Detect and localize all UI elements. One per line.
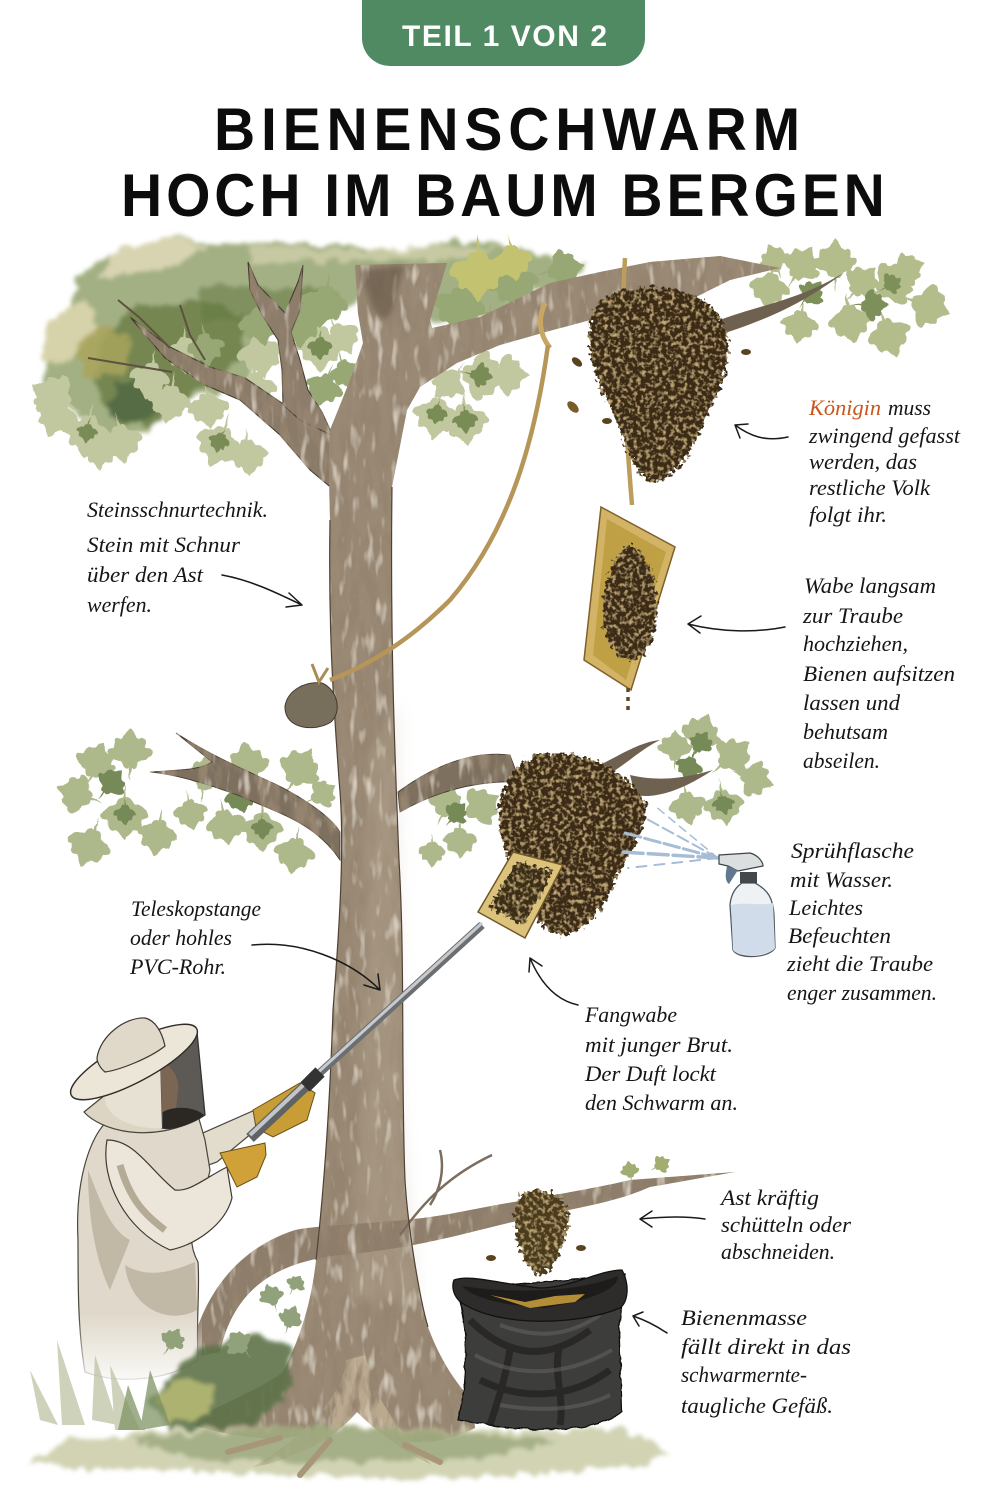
- arrow: shake label to branch: [640, 1211, 705, 1227]
- label: catch comb: Der Duft lockt: [584, 1061, 717, 1086]
- label: queen: folgt ihr.: [809, 502, 887, 527]
- illustration: water spray: [622, 806, 718, 868]
- label: queen: zwingend gefasst: [808, 423, 961, 448]
- arrow: pole label to pole: [252, 944, 380, 990]
- label: spray bottle: Befeuchten: [788, 923, 891, 948]
- label: queen: muss: [888, 395, 931, 420]
- illustration: tree trunk and branches: [88, 256, 845, 1467]
- label: stone and cord technique: Stein mit Schnur: [87, 532, 240, 557]
- label: bee mass falls: taugliche Gefäß.: [681, 1393, 833, 1418]
- label: queen: restliche Volk: [809, 475, 931, 500]
- label: spray bottle: Sprühflasche: [791, 838, 914, 863]
- arrow: bee mass label to bag: [633, 1312, 667, 1333]
- illustration: lower swarm on branch: [486, 1190, 586, 1275]
- label: stone and cord technique: über den Ast: [87, 562, 204, 587]
- label: spray bottle: Leichtes: [788, 895, 863, 920]
- label: raise comb: abseilen.: [803, 748, 880, 773]
- illustration: rope with stone: [285, 303, 550, 728]
- title: HOCH IM BAUM BERGEN: [121, 163, 885, 229]
- label: spray bottle: mit Wasser.: [790, 867, 893, 892]
- label: queen: werden, das: [809, 449, 917, 474]
- label: raise comb: hochziehen,: [803, 631, 908, 656]
- label: telescopic pole: oder hohles: [130, 925, 232, 950]
- label: raise comb: lassen und: [803, 690, 901, 715]
- illustration: rope over branch: [623, 258, 632, 505]
- arrow: comb label to frame: [688, 616, 785, 633]
- illustration: middle left and right foliage: [50, 707, 780, 878]
- illustration: middle swarm cluster: [499, 753, 647, 935]
- label: raise comb: behutsam: [803, 719, 888, 744]
- label: raise comb: Wabe langsam: [804, 573, 936, 598]
- label: raise comb: zur Traube: [802, 603, 903, 628]
- label: raise comb: Bienen aufsitzen: [803, 661, 955, 686]
- label: queen: Königin: [808, 395, 881, 420]
- arrow: queen label to swarm: [735, 424, 788, 439]
- arrow: catch comb label to frame: [529, 958, 578, 1005]
- label: shake branch: schütteln oder: [721, 1212, 851, 1237]
- label: catch comb: [584, 1002, 738, 1115]
- title: BIENENSCHWARM: [214, 97, 800, 163]
- badge: part indicator: TEIL 1 VON 2: [402, 20, 607, 53]
- illustration: hanging honeycomb frame: [584, 507, 675, 714]
- label: catch comb: den Schwarm an.: [585, 1090, 738, 1115]
- illustration: top swarm cluster: [565, 287, 751, 482]
- label: shake branch: Ast kräftig: [719, 1185, 819, 1210]
- label: bee mass falls: Bienenmasse: [681, 1305, 807, 1330]
- label: bee mass falls: [681, 1305, 851, 1418]
- label: shake branch: abschneiden.: [721, 1239, 835, 1264]
- icon: front glove: [220, 1143, 266, 1187]
- illustration: telescopic pole with catch frame: [250, 852, 563, 1138]
- label: bee mass falls: schwarmernte-: [681, 1362, 807, 1387]
- illustration: beekeeper: [60, 1011, 315, 1390]
- label: telescopic pole: [129, 896, 261, 979]
- illustration: black collection bag: [453, 1270, 627, 1429]
- label: spray bottle: [786, 838, 937, 1005]
- label: shake branch: [719, 1185, 851, 1264]
- label: stone and cord technique: [87, 497, 268, 617]
- label: raise comb: [802, 573, 955, 773]
- label: queen: [808, 395, 961, 527]
- label: stone and cord technique: werfen.: [87, 592, 152, 617]
- label: bee mass falls: fällt direkt in das: [681, 1334, 851, 1359]
- illustration: upper canopy foliage: [20, 230, 958, 478]
- label: telescopic pole: Teleskopstange: [131, 896, 261, 921]
- arrow: stone label to trunk: [222, 575, 302, 607]
- label: catch comb: Fangwabe: [584, 1002, 677, 1027]
- label: stone and cord technique: Steinsschnurtechnik.: [87, 497, 268, 522]
- label: catch comb: mit junger Brut.: [585, 1032, 733, 1057]
- title: [121, 97, 885, 229]
- label: spray bottle: enger zusammen.: [787, 980, 937, 1005]
- label: spray bottle: zieht die Traube: [786, 951, 933, 976]
- badge: part indicator: [362, 0, 645, 66]
- label: telescopic pole: PVC-Rohr.: [129, 954, 226, 979]
- illustration: spray bottle: [719, 853, 775, 957]
- illustration: undergrowth: [30, 1270, 670, 1478]
